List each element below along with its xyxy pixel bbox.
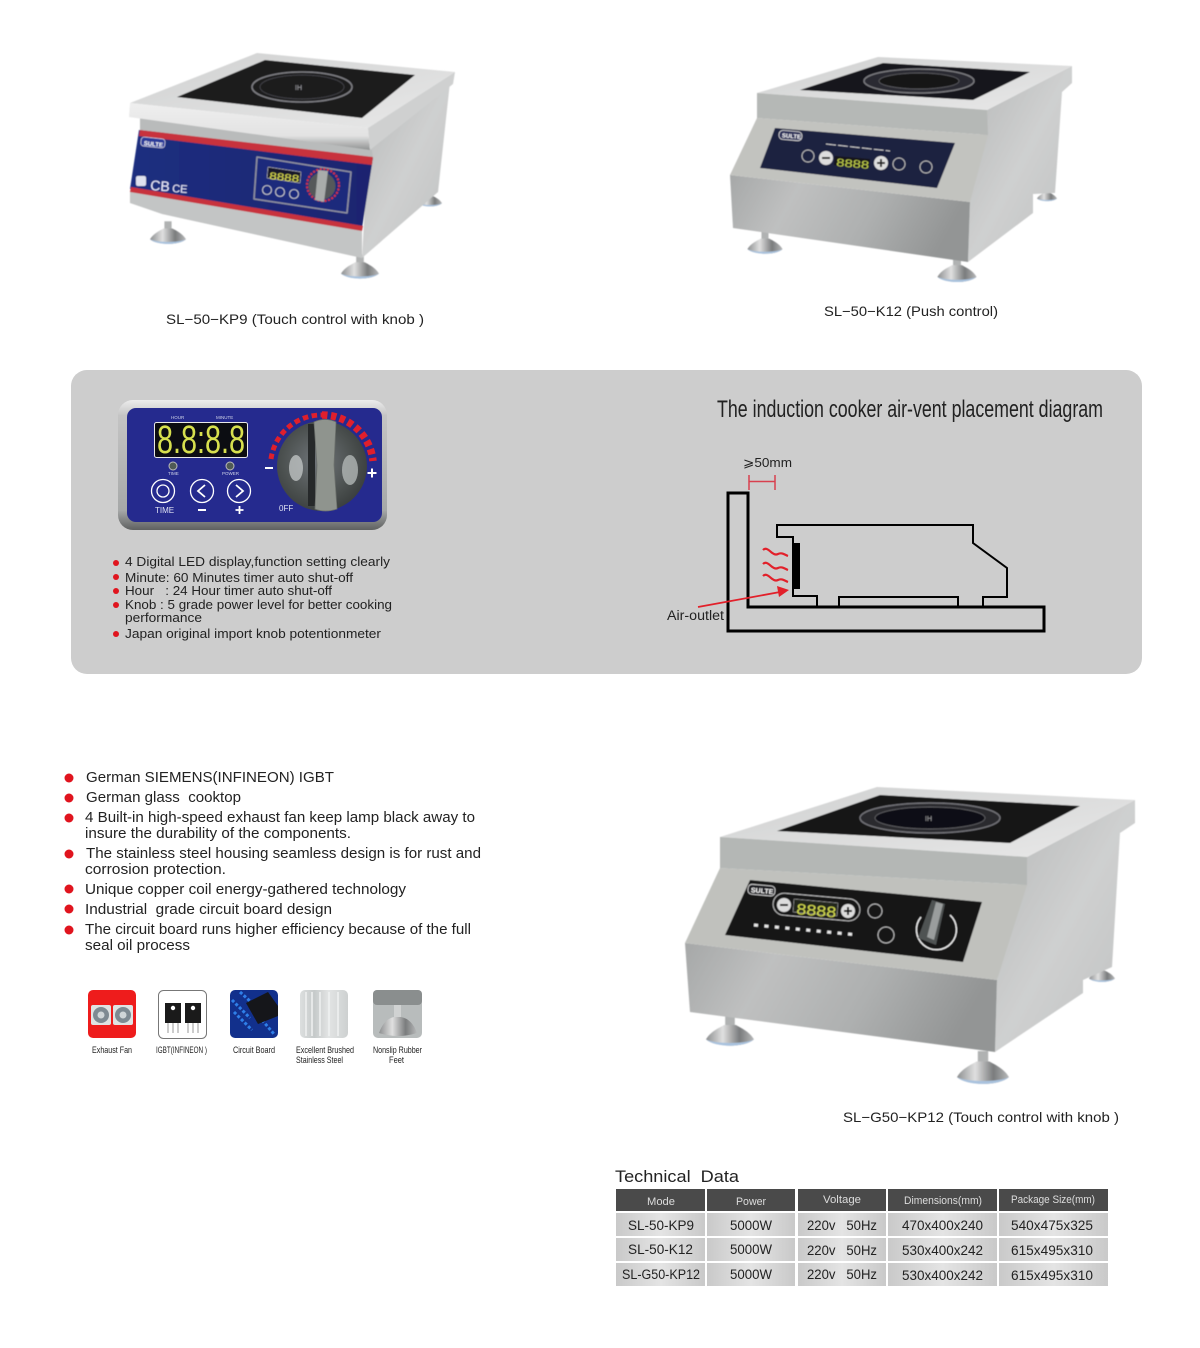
certification marks [136,176,188,196]
dark control panel: SULTE [782,133,801,141]
display labels [168,415,240,476]
display and plus-minus keys: 8888 [796,901,837,921]
feature icon: IGBT: IGBT(INFINEON ) [156,1045,207,1056]
brand badge [141,137,165,149]
button labels: 0FF [279,504,293,513]
bullet list: main features: corrosion protection. [85,862,226,878]
product photo: SL-50-K12 cooker [730,57,1072,282]
black glass hob [177,60,415,118]
minus and plus marks [265,467,376,478]
bullet list: main features: seal oil process [85,938,190,954]
black glass hob: IH [295,85,302,92]
row: SL-50-KP9: 220v 50Hz [807,1218,877,1233]
bullet list: knob features: performance [125,611,202,625]
display labels: POWER [222,471,240,476]
stainless body [685,800,1135,1052]
row: SL-50-K12: 530x400x242 [902,1243,983,1258]
product photo: SL-G50-KP12 cooker [685,787,1135,1084]
air outlet label: Air-outlet [667,608,724,623]
knob [916,900,956,950]
bullet list: main features: German SIEMENS(INFINEON) IGBT [86,770,334,786]
feature icon: nonslip rubber feet: Feet [389,1055,404,1066]
button labels [155,504,293,515]
row: SL-50-K12: SL-50-K12 [628,1242,693,1257]
feature icon: brushed stainless steel: Excellent Brushed [296,1045,354,1056]
bullet list: main features: 4 Built-in high-speed exhaust fan keep lamp black away to [85,810,475,826]
certification marks: CE [172,183,188,196]
table header: Voltage [823,1194,861,1206]
certification marks: CB [150,177,170,194]
blue control band [130,130,373,231]
LED display: 8.8:8.8 [157,418,245,462]
bullet list: knob features: Knob : 5 grade power level for better cooking [125,598,392,612]
cooktop plate [757,57,1072,135]
row: SL-50-KP9: 5000W [730,1218,772,1233]
feature icon: circuit board [230,990,278,1056]
feet [747,188,1057,282]
heat waves [763,549,788,582]
row: SL-G50-KP12: 5000W [730,1267,772,1282]
feature icon: nonslip rubber feet: Nonslip Rubber [373,1045,422,1056]
feature icon: circuit board: Circuit Board [233,1045,275,1056]
product photo: SL-50-KP9 cooker [129,53,455,279]
feature icon: exhaust fan [88,990,136,1056]
row: SL-50-K12: 615x495x310 [1011,1243,1093,1258]
mini control panel: 8888 [269,171,300,185]
stainless body [130,82,450,258]
knob [277,420,367,511]
vent strip [794,543,800,589]
feature icon: brushed stainless steel: Stainless Steel [296,1055,343,1066]
cooktop plate [129,53,455,150]
feet [150,191,442,279]
row: SL-G50-KP12: SL-G50-KP12 [622,1267,700,1282]
table header [616,1189,1108,1211]
black glass hob [800,63,1030,100]
air-vent placement diagram [667,455,1044,631]
row: SL-50-K12: 220v 50Hz [807,1243,877,1258]
touch buttons [152,480,250,502]
row: SL-50-KP9: 470x400x240 [902,1218,983,1233]
dark control panel: 8888 [836,157,870,172]
panel: knob and vent information [71,370,1142,674]
red power scale [271,415,373,461]
row: SL-G50-KP12 [616,1263,1108,1286]
table header: Dimensions(mm) [904,1195,982,1207]
technical data table [616,1189,1108,1286]
brand badge [748,884,775,896]
row: SL-50-KP9: 540x475x325 [1011,1218,1093,1233]
row: SL-G50-KP12: 530x400x242 [902,1268,983,1283]
row: SL-G50-KP12: 615x495x310 [1011,1268,1093,1283]
feature icon: exhaust fan: Exhaust Fan [92,1045,132,1056]
table header: Package Size(mm) [1011,1194,1095,1206]
wall and floor outline [728,493,1044,631]
caption: SL-50-K12: SL−50−K12 (Push control) [824,303,998,319]
knob control panel illustration [118,400,387,530]
caption: SL-50-KP9: SL−50−KP9 (Touch control with knob ) [166,311,424,327]
bullet list: main features: The stainless steel housing seamless design is for rust and [86,846,481,862]
feature icon: brushed stainless steel [296,990,354,1066]
feature icon: IGBT [156,990,207,1056]
stainless body [730,66,1072,262]
feet [706,966,1115,1084]
bullet list: knob features: Hour : 24 Hour timer auto shut-off [125,584,333,598]
cooktop plate [720,787,1135,885]
table header: Power [736,1196,766,1208]
bullet list: main features: The circuit board runs higher efficiency because of the full [85,922,471,938]
bullet list: main features: Unique copper coil energy-gathered technology [85,882,407,898]
clearance label: ⩾50mm [743,455,792,470]
bullet list: knob features: Japan original import knob potentionmeter [125,627,381,641]
black glass hob: IH [925,816,932,823]
row: SL-G50-KP12: 220v 50Hz [807,1267,877,1282]
bullet list: knob features: Minute: 60 Minutes timer auto shut-off [125,571,354,585]
power level dots [754,925,858,935]
black control panel [725,880,982,962]
display and plus-minus keys [772,892,861,922]
black glass hob [777,795,1080,843]
display labels: MINUTE [216,415,233,420]
brand badge: SULTE [143,141,163,149]
bullet list: knob features [113,555,392,641]
cooker outline [777,525,1007,607]
timer and power keys [868,904,894,943]
dark control panel [760,128,955,188]
bullet list: knob features: 4 Digital LED display,function setting clearly [125,555,391,569]
bullet list: main features [64,770,481,954]
row: SL-50-KP9: SL-50-KP9 [628,1218,694,1233]
table header: Mode [647,1196,675,1208]
grey panel background [71,370,1142,674]
bullet list: main features: German glass cooktop [86,790,241,806]
row: SL-50-K12 [616,1238,1108,1261]
display labels: HOUR [171,415,185,420]
row: SL-50-KP9 [616,1213,1108,1236]
metal frame [118,400,387,530]
clearance dimension [749,475,775,490]
row: SL-50-K12: 5000W [730,1242,772,1257]
display labels: TIME [168,471,179,476]
caption: SL-G50-KP12: SL−G50−KP12 (Touch control with knob ) [843,1109,1119,1125]
technical data heading: Technical Data [615,1167,740,1186]
feature icon: nonslip rubber feet [373,990,422,1066]
button labels: TIME [155,506,174,515]
blue face [127,408,382,522]
bullet list: main features: insure the durability of the components. [85,826,351,842]
mini control panel [254,157,351,213]
brand badge: SULTE [751,887,774,896]
bullet list: main features: Industrial grade circuit board design [85,902,332,918]
red arrow to air outlet [698,586,789,607]
